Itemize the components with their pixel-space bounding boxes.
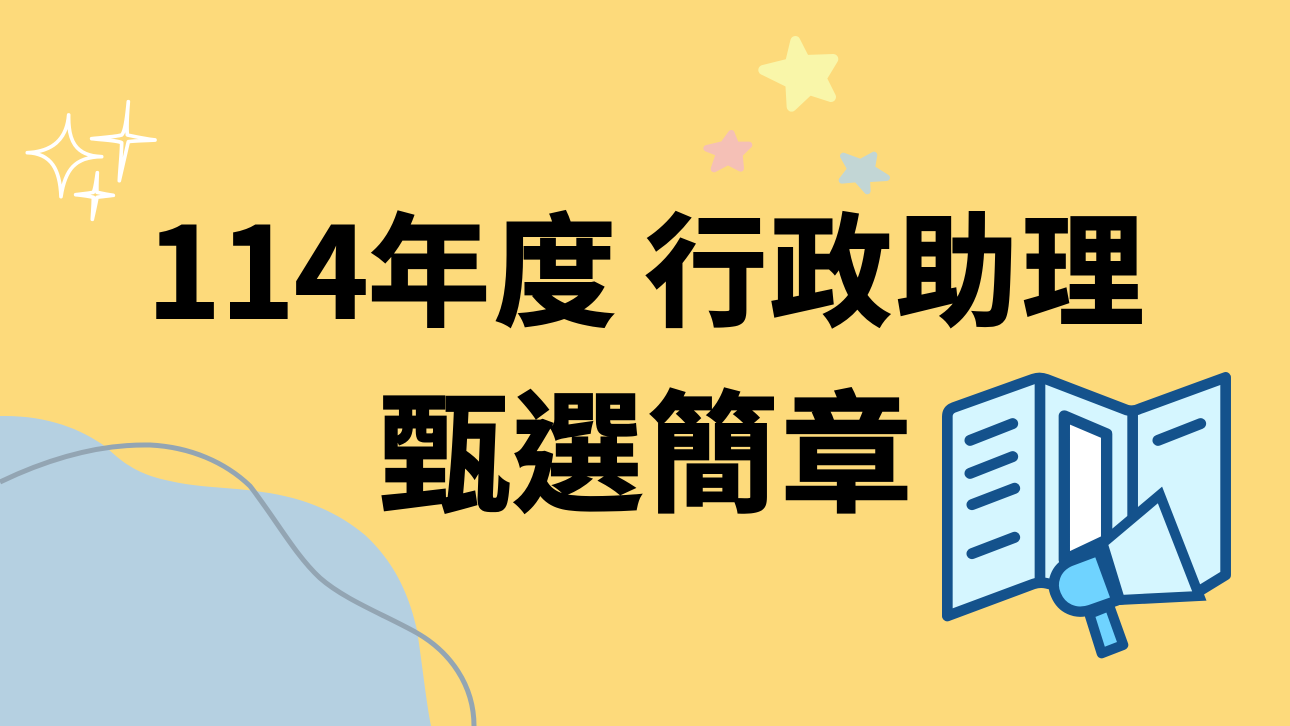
icon: brochure and megaphone (947, 377, 1226, 653)
title line 2: 甄 (379, 349, 510, 539)
icon: yellow star (763, 41, 833, 107)
curved line (0, 445, 474, 726)
title line 1: 助 (896, 175, 1018, 352)
icon: pink star (707, 133, 749, 169)
icon: white sparkles (27, 102, 155, 219)
title line 2: 簡 (647, 349, 778, 539)
text lines (970, 424, 1201, 554)
title line 1 (147, 173, 1144, 354)
brochure folds (1040, 380, 1133, 582)
megaphone body (1054, 551, 1117, 612)
brochure body (947, 377, 1226, 616)
title line 1: 年 (368, 175, 490, 352)
title line 1: 114 (147, 173, 368, 354)
brochure window (1064, 416, 1107, 560)
megaphone cone (1103, 495, 1199, 600)
icon: blue-grey star (842, 155, 887, 191)
title line 1: 理 (1022, 175, 1144, 352)
megaphone handle (1089, 606, 1123, 653)
title line 1: 政 (770, 175, 892, 352)
blue blob (0, 416, 431, 726)
title line 1: 度 (494, 175, 616, 352)
title line 2 (379, 349, 912, 539)
title line 2: 選 (512, 349, 643, 539)
title line 2: 章 (781, 349, 912, 539)
title line 1: 行 (645, 175, 767, 352)
